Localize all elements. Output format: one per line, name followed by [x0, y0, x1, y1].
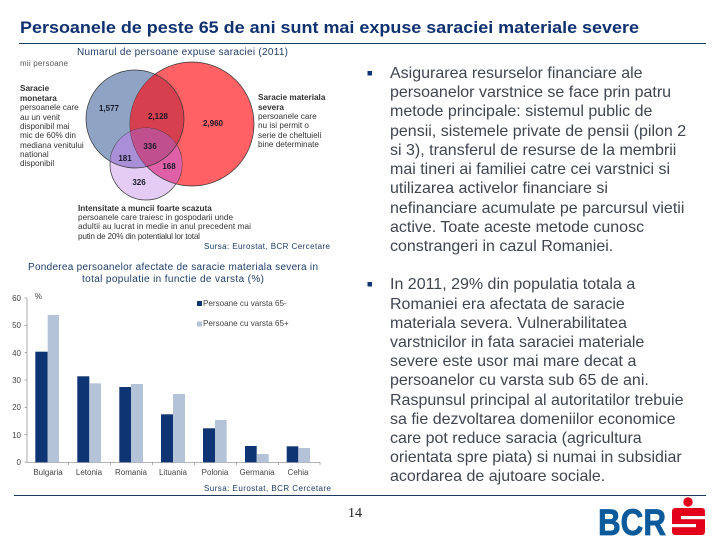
text block: second bullet: persoanelor cu varsta sub 65 de ani.	[390, 372, 649, 389]
text block: second bullet: orientata spre piata) si numai in subsidiar	[390, 449, 682, 466]
x axis labels: Cehia	[288, 468, 309, 477]
label: saracie monetara	[20, 84, 84, 168]
text block: second bullet: Raspunsul principal al autoritatilor trebuie	[390, 392, 684, 409]
legend: Persoane cu varsta 65+	[203, 319, 289, 328]
overlap: materiala and intensitate	[130, 128, 182, 184]
label: intensitate a muncii	[78, 204, 251, 241]
text block: first bullet: utilizarea activelor financiare si	[390, 180, 608, 197]
x axis labels: Polonia	[202, 468, 229, 477]
label: saracie materiala severa: severa	[258, 103, 284, 112]
text block: first bullet: Asigurarea resurselor financiare ale	[390, 65, 643, 82]
chart heading	[28, 262, 318, 285]
y axis labels: 0	[17, 458, 22, 467]
venn numbers: 2,960	[203, 119, 224, 128]
circle: saracie monetara	[86, 70, 184, 168]
venn numbers: 168	[162, 162, 176, 171]
x axis labels: Romania	[115, 468, 148, 477]
y axis labels: 50	[12, 321, 22, 330]
title: Persoanele de peste 65 de ani sunt mai expuse saraciei materiale severe	[20, 18, 639, 37]
y axis labels: 60	[12, 294, 22, 303]
text block: second bullet: materiala severa. Vulnerabilitatea	[390, 315, 627, 332]
text block: second bullet: sa fie dezvoltarea domeniilor economice	[390, 411, 676, 428]
label: saracie materiala severa: Saracie materiala	[258, 93, 326, 102]
circle: intensitate a muncii	[110, 128, 182, 200]
circle: saracie materiala severa	[130, 62, 254, 186]
x axis labels: Letonia	[76, 468, 103, 477]
text block: first bullet: metode principale: sistemul public de	[390, 103, 652, 120]
text block: first bullet	[368, 65, 686, 255]
bars: persoane cu varsta 65-	[35, 352, 298, 462]
legend	[197, 299, 289, 328]
venn numbers: 326	[132, 178, 146, 187]
label: saracie monetara: Saracie	[20, 84, 50, 93]
label: saracie monetara: disponibil mai	[20, 122, 70, 131]
venn heading: Numarul de persoane expuse saraciei (2011)	[77, 47, 288, 58]
text block: second bullet: varstnicilor in fata saraciei materiale	[390, 334, 644, 351]
y axis labels	[12, 292, 42, 467]
text block: second bullet: severe este usor mai mare decat a	[390, 353, 636, 370]
source note: Sursa: Eurostat, BCR Cercetare	[204, 242, 331, 251]
y axis labels: 30	[12, 376, 22, 385]
text block: first bullet: persoanelor varstnice se face prin patru	[390, 84, 671, 101]
axes	[24, 298, 320, 465]
logo symbol	[672, 497, 705, 535]
text block: first bullet: active. Toate aceste metode cunosc	[390, 219, 644, 236]
y axis labels: %	[35, 292, 42, 301]
label: saracie monetara: mediana venitului	[20, 141, 84, 150]
label: saracie monetara: au un venit	[20, 113, 61, 122]
label: intensitate a muncii: Intensitate a muncii foarte scazuta	[78, 204, 212, 213]
panel: bar chart	[12, 262, 332, 493]
overlap: monetara and materiala	[130, 74, 184, 145]
label: saracie materiala severa	[258, 93, 326, 149]
label: saracie monetara: disponibil	[20, 159, 54, 168]
source note: Sursa: Eurostat, BCR Cercetare	[204, 484, 332, 493]
label: saracie materiala severa: persoanele care	[258, 112, 317, 121]
text block: second bullet: care pot reduce saracia (agricultura	[390, 430, 642, 447]
logo: BCR	[598, 497, 705, 540]
venn numbers: 2,128	[148, 112, 169, 121]
venn numbers: 181	[118, 154, 132, 163]
x axis labels	[33, 468, 309, 477]
overlap: monetara and intensitate	[110, 128, 176, 168]
label: saracie materiala severa: bine determinate	[258, 140, 319, 149]
x axis labels: Lituania	[159, 468, 188, 477]
label: saracie materiala severa: serie de cheltuieli	[258, 131, 321, 140]
y axis labels: 10	[12, 431, 22, 440]
chart heading: Ponderea persoanelor afectate de saracie materiala severa in	[28, 262, 318, 273]
venn numbers: 336	[143, 142, 157, 151]
text block: second bullet: In 2011, 29% din populatia totala a	[390, 276, 635, 293]
text block: second bullet	[368, 276, 684, 485]
text block: second bullet: acordarea de ajutoare sociale.	[390, 468, 605, 485]
panel: venn diagram	[20, 47, 331, 251]
venn numbers	[99, 104, 224, 187]
x axis labels: Germania	[239, 468, 275, 477]
chart heading: total populatie in functie de varsta (%)	[82, 274, 264, 285]
text block: first bullet: constrangeri in cazul Romaniei.	[390, 238, 613, 255]
bars: persoane cu varsta 65+	[48, 315, 310, 462]
label: saracie monetara: mic de 60% din	[20, 131, 76, 140]
unit label: mii persoane	[20, 59, 69, 68]
label: saracie monetara: monetara	[20, 94, 57, 103]
legend: Persoane cu varsta 65-	[203, 299, 287, 308]
text block: first bullet: nefinanciare acumulate pe parcursul vietii	[390, 200, 684, 217]
text block: second bullet: Romaniei era afectata de saracie	[390, 296, 625, 313]
label: saracie materiala severa: nu isi permit o	[258, 121, 309, 130]
page number: 14	[348, 506, 362, 521]
y axis labels: 40	[12, 349, 22, 358]
bullet	[368, 71, 372, 76]
y axis labels: 20	[12, 403, 22, 412]
bullet	[368, 282, 372, 286]
x axis labels: Bulgaria	[33, 468, 63, 477]
overlap: all three	[130, 128, 177, 167]
text block: first bullet: mai tineri ai familiei catre cei varstnici si	[390, 161, 670, 178]
label: intensitate a muncii: adultii au lucrat in medie in anul precedent mai	[78, 222, 251, 231]
text block: first bullet: pensii, sistemele private de pensii (pilon 2	[390, 123, 686, 140]
label: intensitate a muncii: persoanele care traiesc in gospodarii unde	[78, 213, 233, 222]
label: intensitate a muncii: putin de 20% din potentialul lor total	[78, 232, 200, 241]
label: saracie monetara: national	[20, 150, 49, 159]
venn numbers: 1,577	[99, 104, 120, 113]
text block: first bullet: si 3), transferul de resurse de la membrii	[390, 142, 676, 159]
label: saracie monetara: persoanele care	[20, 103, 79, 112]
